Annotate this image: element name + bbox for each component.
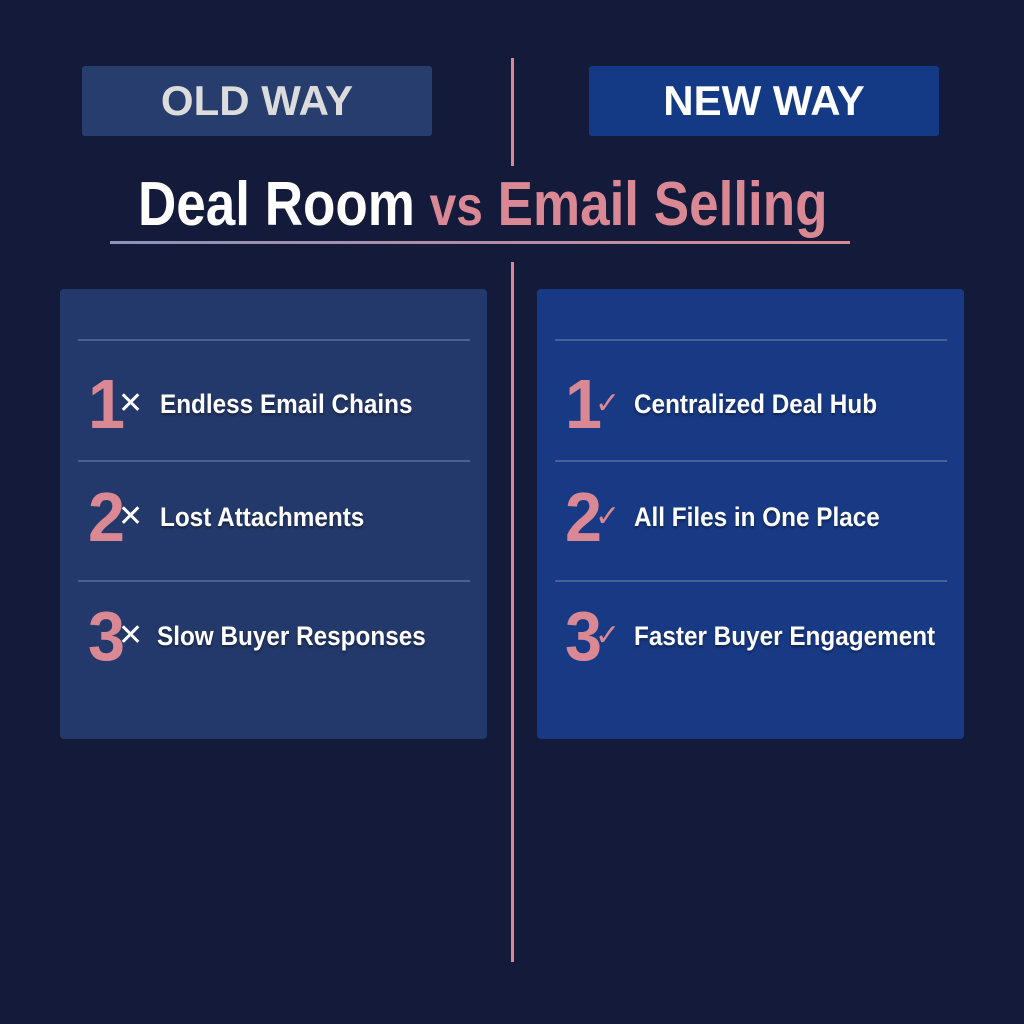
item 3 old xyxy=(88,597,426,675)
item 3 old: Slow Buyer Responses xyxy=(157,621,426,651)
panel: old way xyxy=(60,289,487,739)
item 2 old: 2 xyxy=(88,478,125,556)
item 3 new xyxy=(565,597,936,675)
item 2 new: All Files in One Place xyxy=(634,502,880,532)
divider line top xyxy=(511,58,514,166)
item 2 new: ✓ xyxy=(595,500,620,533)
item 2 old: Lost Attachments xyxy=(160,502,364,532)
item 1 old: Endless Email Chains xyxy=(160,389,413,419)
item 1 new xyxy=(565,365,878,443)
item 1 new: 1 xyxy=(565,365,602,443)
item 3 old: 3 xyxy=(88,597,125,675)
item 1 old xyxy=(88,365,413,443)
tag: new way: NEW WAY xyxy=(663,77,865,124)
tag: old way: OLD WAY xyxy=(161,77,353,124)
item 2 new xyxy=(565,478,880,556)
item 2 new: 2 xyxy=(565,478,602,556)
item 3 new: 3 xyxy=(565,597,602,675)
item 1 old: 1 xyxy=(88,365,125,443)
item 3 new: Faster Buyer Engagement xyxy=(634,621,935,651)
item 1 new: ✓ xyxy=(595,387,620,420)
title underline xyxy=(110,241,850,244)
item 1 old: ✕ xyxy=(118,387,143,420)
divider line bottom xyxy=(511,262,514,962)
title: Deal Room vs Email Selling xyxy=(138,170,828,239)
item 1 new: Centralized Deal Hub xyxy=(634,389,877,419)
item 2 old: ✕ xyxy=(118,500,143,533)
item 3 old: ✕ xyxy=(118,619,143,652)
tag: old way xyxy=(82,66,432,136)
tag: new way xyxy=(589,66,939,136)
item 2 old xyxy=(88,478,364,556)
item 3 new: ✓ xyxy=(595,619,620,652)
panel: new way xyxy=(537,289,964,739)
